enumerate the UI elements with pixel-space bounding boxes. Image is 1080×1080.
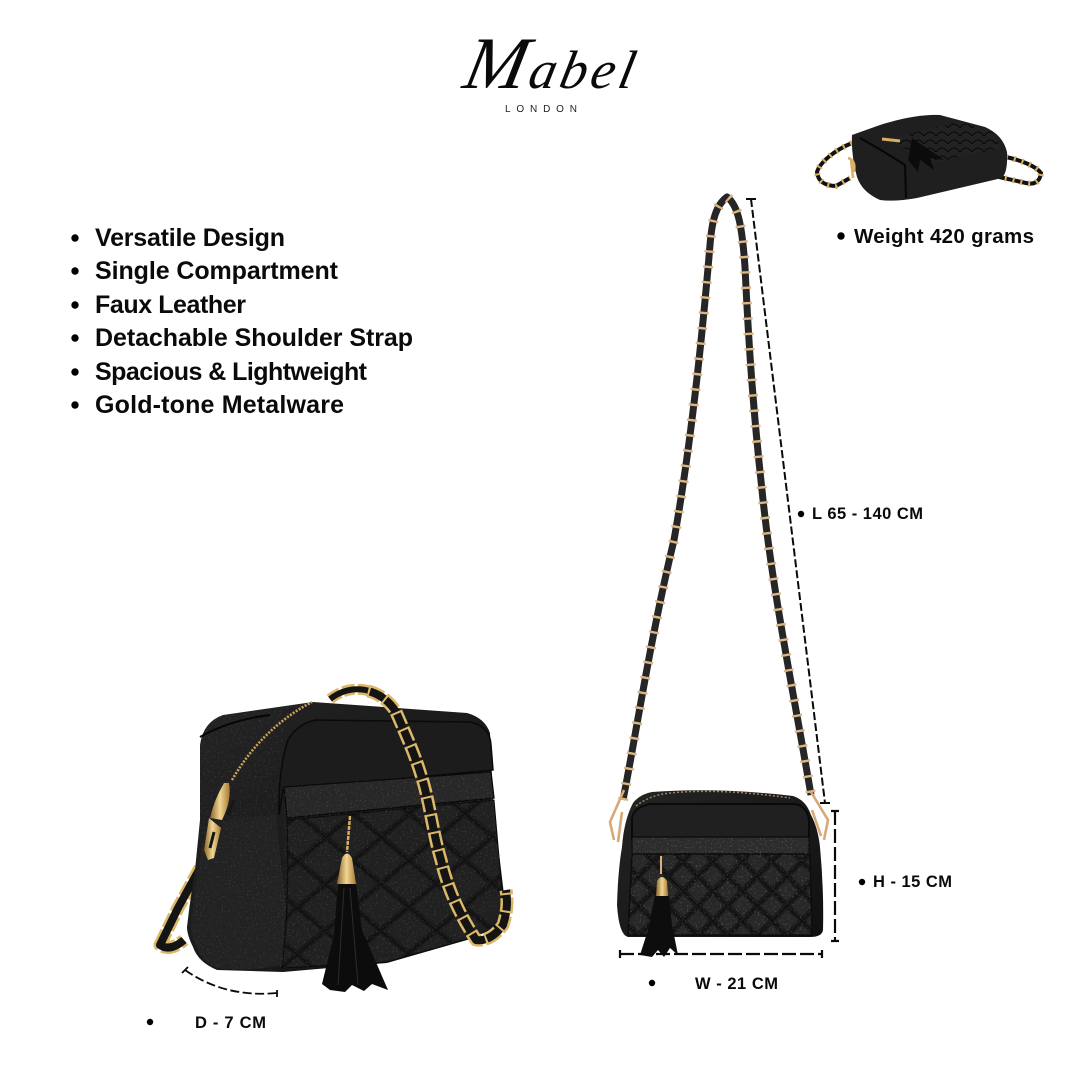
gusset leather grain xyxy=(190,702,313,970)
quilted panel xyxy=(628,854,812,935)
gold clasp xyxy=(204,783,234,860)
dimension: width xyxy=(620,950,822,958)
tassel xyxy=(322,816,388,992)
feature list: Faux Leather xyxy=(95,291,246,319)
label: strap length: L 65 - 140 CM xyxy=(812,505,923,523)
strap clasps xyxy=(610,790,828,842)
seam and front pocket top xyxy=(200,715,270,737)
tassel xyxy=(640,856,678,957)
front pocket outline xyxy=(632,804,809,840)
feature list xyxy=(71,224,413,419)
left chain xyxy=(160,868,200,948)
label: width: W - 21 CM xyxy=(695,975,778,993)
dimension: depth xyxy=(182,967,277,997)
front strap band xyxy=(632,837,809,854)
photo: bag three-quarter view xyxy=(160,689,507,992)
front chain xyxy=(368,691,507,940)
feature list: Spacious & Lightweight xyxy=(95,358,368,386)
zipper xyxy=(232,702,312,780)
label: depth xyxy=(147,1014,266,1032)
small bag chain xyxy=(817,143,1041,186)
small bag quilted top xyxy=(892,122,1000,165)
label: width xyxy=(649,975,778,993)
leather grain highlights xyxy=(628,838,812,935)
feature list: Gold-tone Metalware xyxy=(95,391,344,419)
zipper top edge xyxy=(636,791,790,806)
bag body xyxy=(617,790,823,937)
label: height: H - 15 CM xyxy=(873,873,952,891)
logo: Mabel London: Mabel xyxy=(456,23,645,105)
quilted panel xyxy=(282,800,503,968)
feature list: Single Compartment xyxy=(95,257,339,285)
dimension: strap length xyxy=(746,199,830,803)
photo: bag with strap fully extended xyxy=(610,197,828,957)
gusset side panel xyxy=(191,815,286,969)
feature list: Versatile Design xyxy=(95,224,285,252)
small bag tassel xyxy=(908,138,944,172)
front leather grain xyxy=(282,772,503,968)
strap band xyxy=(284,772,494,818)
label: weight: Weight 420 grams xyxy=(854,225,1034,248)
small bag clasp xyxy=(848,158,854,178)
strap xyxy=(623,197,811,800)
logo: Mabel London: LONDON xyxy=(505,104,577,115)
feature list: Detachable Shoulder Strap xyxy=(95,324,413,352)
top chain xyxy=(330,689,373,699)
label: depth: D - 7 CM xyxy=(195,1014,266,1032)
bag body xyxy=(187,702,505,972)
small bag body xyxy=(852,115,1007,201)
dimension: height xyxy=(831,811,839,941)
photo: small bag lying on its base xyxy=(817,115,1041,201)
